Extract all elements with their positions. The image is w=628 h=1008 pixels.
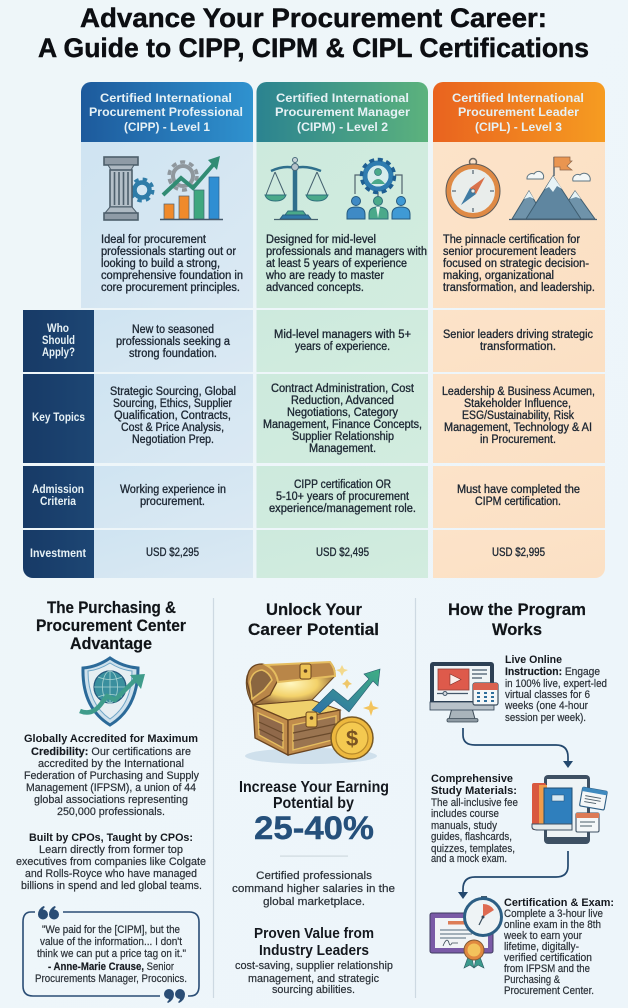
row: who should apply: years of experience. <box>295 341 390 353</box>
row: key topics: Leadership & Business Acumen, <box>442 386 595 398</box>
panel: advantage <box>16 599 206 1003</box>
CIPP description panel <box>81 142 253 308</box>
salaries text: Certified professionals <box>256 870 373 882</box>
row: key topics: Sourcing, Ethics, Supplier <box>113 398 232 410</box>
step 3 text: online exam in the 8th <box>504 919 601 931</box>
row: who should apply: Should <box>42 335 75 347</box>
icon: opening quote <box>38 906 59 920</box>
earning potential: Potential by <box>273 795 354 812</box>
CIPM header: (CIPM) - Level 2 <box>297 122 388 134</box>
step 2 text: Comprehensive <box>431 773 513 785</box>
salaries text: global marketplace. <box>263 896 365 908</box>
row: admission criteria: Admission <box>32 484 84 496</box>
panel: how the program works <box>430 601 614 997</box>
testimonial callout <box>23 906 199 1003</box>
CIPL header: (CIPL) - Level 3 <box>475 122 562 134</box>
row: key topics: Supplier Relationship <box>292 431 394 443</box>
row: admission criteria: Working experience in <box>120 484 226 496</box>
CIPM header: Procurement Manager <box>275 107 411 119</box>
row: admission criteria: CIPM certification. <box>475 496 561 508</box>
testimonial callout: Procurements Manager, Proconics. <box>35 973 187 985</box>
step 3 text: Purchasing & <box>504 974 561 986</box>
CIPP header: (CIPP) - Level 1 <box>124 122 211 134</box>
proven value text: cost-saving, supplier relationship <box>235 960 393 972</box>
stat: 25-40%: 25-40% <box>254 810 374 846</box>
advantage: CPO text <box>16 832 206 892</box>
advantage: accreditation text: 250,000 professionals. <box>57 806 165 818</box>
panel: CIPL column <box>433 82 605 308</box>
CIPP description: comprehensive foundation in <box>101 270 243 282</box>
row: key topics: Stakeholder Influence, <box>464 398 571 410</box>
step 3 text: lifetime, digitally- <box>504 941 579 953</box>
step 1 text: in 100% live, expert-led <box>505 678 607 690</box>
row: who should apply: Mid-level managers with 5+ <box>274 329 411 341</box>
advantage: accreditation text: global associations representing <box>34 794 188 806</box>
icon: closing quote <box>164 989 185 1003</box>
title: Advance Your Procurement Career: <box>80 3 547 33</box>
career heading: Unlock Your <box>266 601 363 619</box>
CIPL description panel <box>433 142 605 308</box>
row: key topics: Key Topics <box>32 412 85 424</box>
row: key topics: ESG/Sustainability, Risk <box>462 410 574 422</box>
program heading: How the Program <box>448 601 586 619</box>
step 2 text: and a mock exam. <box>431 853 507 865</box>
CIPP header <box>81 82 253 142</box>
proven value text <box>235 926 393 996</box>
row: key topics: Management. <box>309 443 376 455</box>
CIPM description: at least 5 years of experience <box>266 258 407 270</box>
row: admission criteria: experience/management role. <box>269 503 416 515</box>
row: key topics: Contract Administration, Cost <box>271 383 415 395</box>
icon: treasure chest with coin and arrow: $ <box>346 726 358 751</box>
testimonial callout: think we can put a price tag on it." <box>37 948 186 960</box>
row: who should apply: Apply? <box>42 347 75 359</box>
CIPM description <box>265 234 427 294</box>
row: admission criteria <box>23 466 605 528</box>
program heading <box>448 601 586 639</box>
advantage: accreditation text: Globally Accredited for Maximum <box>24 733 198 745</box>
earning potential <box>239 779 389 846</box>
arrow: step 2 to step 3 <box>458 851 568 899</box>
row: who should apply <box>23 310 605 372</box>
step 1 text: Live Online <box>505 654 562 666</box>
advantage: accreditation text <box>24 733 200 818</box>
advantage: CPO text: executives from companies like Colgate <box>16 856 206 868</box>
row: key topics: Strategic Sourcing, Global <box>110 386 236 398</box>
CIPL header: Procurement Leader <box>458 107 580 119</box>
testimonial callout: value of the information... I don't <box>40 936 182 948</box>
row: key topics: in Procurement. <box>480 434 556 446</box>
CIPM header <box>256 82 428 142</box>
career heading <box>248 601 379 639</box>
advantage: CPO text: Learn directly from former top <box>39 844 183 856</box>
CIPM description: advanced concepts. <box>266 282 364 294</box>
panel: CIPM column <box>256 82 428 308</box>
row: who should apply: transformation. <box>480 341 556 353</box>
advantage heading: Advantage <box>70 635 152 653</box>
row: admission criteria: CIPP certification OR <box>294 479 391 491</box>
step 3 text: week to earn your <box>503 930 582 942</box>
row: who should apply: New to seasoned <box>132 324 214 336</box>
career heading: Career Potential <box>248 621 379 639</box>
CIPL header <box>433 82 605 142</box>
step 1 text: weeks (one 4-hour <box>504 700 588 712</box>
advantage: CPO text: Built by CPOs, Taught by CPOs: <box>29 832 193 844</box>
icon: tablet with books and cards <box>532 775 607 844</box>
earning potential: Increase Your Earning <box>239 779 389 796</box>
row: key topics: Qualification, Contracts, <box>114 410 231 422</box>
step 3 text <box>503 897 614 997</box>
CIPL description <box>443 234 595 294</box>
CIPL description: The pinnacle certification for <box>443 234 580 246</box>
row: investment: USD $2,495 <box>316 547 369 559</box>
testimonial callout: - Anne-Marie Crause, Senior <box>48 961 174 973</box>
row: admission criteria: Must have completed the <box>457 484 580 496</box>
advantage: accreditation text: Management (IFPSM), a union of 44 <box>26 782 196 794</box>
CIPP description: looking to build a strong, <box>101 258 220 270</box>
advantage heading: Procurement Center <box>36 617 187 635</box>
row: who should apply: professionals seeking a <box>116 336 231 348</box>
step 1 text: session per week). <box>505 712 586 724</box>
icon: rising bar chart with gear <box>160 156 223 220</box>
row: key topics: Management, Finance Concepts, <box>263 419 422 431</box>
CIPM description: who are ready to master <box>265 270 384 282</box>
step 3 text: Complete a 3-hour live <box>504 908 603 920</box>
step 1 text: Instruction: Engage <box>505 666 600 678</box>
CIPM description panel <box>256 142 428 308</box>
row: who should apply: Senior leaders driving strategic <box>443 329 593 341</box>
arrow: step 1 to step 2 <box>463 728 573 768</box>
row: key topics: Cost & Price Analysis, <box>121 422 224 434</box>
CIPL description: making, organizational <box>443 270 554 282</box>
icon: pillar and gear <box>104 157 153 220</box>
CIPL description: senior procurement leaders <box>443 246 576 258</box>
row: key topics: Reduction, Advanced <box>291 395 394 407</box>
row: investment: Investment <box>30 548 86 560</box>
CIPL header: Certified International <box>452 93 584 105</box>
advantage heading: The Purchasing & <box>47 599 176 617</box>
step 3 text: Procurement Center. <box>504 985 594 997</box>
CIPP description: Ideal for procurement <box>101 234 207 246</box>
title <box>38 3 589 63</box>
step 2 text: The all-inclusive fee <box>431 797 518 809</box>
step 2 text <box>431 773 518 865</box>
step 1 text <box>504 654 607 724</box>
icon: compass <box>446 158 500 218</box>
testimonial callout: "We paid for the [CIPM], but the <box>42 924 180 936</box>
CIPP description: core procurement principles. <box>101 282 240 294</box>
advantage heading <box>36 599 187 653</box>
step 1 text: virtual classes for 6 <box>505 689 590 701</box>
row: key topics: Negotiation Prep. <box>132 434 214 446</box>
icon: balance scales <box>265 158 328 220</box>
step 2 text: guides, flashcards, <box>431 831 512 843</box>
row: investment <box>23 530 605 578</box>
CIPM description: professionals and managers with <box>266 246 427 258</box>
panel: career potential <box>232 601 395 996</box>
step 2 text: includes course <box>431 808 499 820</box>
CIPP header: Procurement Professional <box>89 107 243 119</box>
step 3 text: Certification & Exam: <box>504 897 614 909</box>
icon: monitor with video and calendar <box>430 662 498 722</box>
row: investment: USD $2,995 <box>492 547 545 559</box>
advantage: accreditation text: accredited by the International <box>38 758 184 770</box>
advantage: CPO text: and Rolls-Royce who have managed <box>25 868 197 880</box>
step 3 text: verified certification <box>504 952 592 964</box>
salaries text: command higher salaries in the <box>232 883 395 895</box>
row: investment: USD $2,295 <box>146 547 199 559</box>
proven value text: sourcing abilities. <box>272 984 355 996</box>
row: key topics: Management, Technology & AI <box>444 422 592 434</box>
row: key topics <box>23 374 605 463</box>
panel: CIPP column <box>81 82 253 308</box>
proven value text: Proven Value from <box>254 926 374 942</box>
row: admission criteria: Criteria <box>40 496 77 508</box>
icon: mountain with flag <box>509 157 597 220</box>
CIPM description: Designed for mid-level <box>266 234 376 246</box>
CIPP description <box>101 234 243 294</box>
icon: certificate with stopwatch and seal <box>430 896 502 968</box>
row: key topics: Negotiations, Category <box>287 407 398 419</box>
icon: shield with globe and arrow <box>80 658 145 725</box>
proven value text: management, and strategic <box>248 973 380 985</box>
CIPM header: Certified International <box>276 93 409 105</box>
row: who should apply: Who <box>47 323 69 335</box>
row: admission criteria: procurement. <box>140 496 205 508</box>
icon: manager gear and team <box>347 160 410 219</box>
advantage: CPO text: billions in spend and led global teams. <box>21 880 202 892</box>
advantage: accreditation text: Federation of Purchasing and Supply <box>24 770 200 782</box>
step 2 text: quizzes, templates, <box>431 843 515 855</box>
title: A Guide to CIPP, CIPM & CIPL Certifications <box>38 33 589 63</box>
row: admission criteria: 5-10+ years of procurement <box>276 491 410 503</box>
program heading: Works <box>492 621 542 639</box>
CIPP header: Certified International <box>100 93 232 105</box>
CIPL description: focused on strategic decision- <box>443 258 589 270</box>
proven value text: Industry Leaders <box>259 943 369 959</box>
step 3 text: from IFPSM and the <box>504 963 590 975</box>
salaries text <box>232 870 395 908</box>
advantage: accreditation text: Credibility: Our certifications are <box>31 746 191 758</box>
CIPP description: professionals starting out or <box>101 246 236 258</box>
icon: treasure chest with coin and arrow <box>245 662 380 764</box>
CIPL description: transformation, and leadership. <box>443 282 595 294</box>
comparison table <box>23 310 605 578</box>
step 2 text: manuals, study <box>431 820 498 832</box>
step 2 text: Study Materials: <box>431 785 517 797</box>
row: who should apply: strong foundation. <box>129 348 217 360</box>
